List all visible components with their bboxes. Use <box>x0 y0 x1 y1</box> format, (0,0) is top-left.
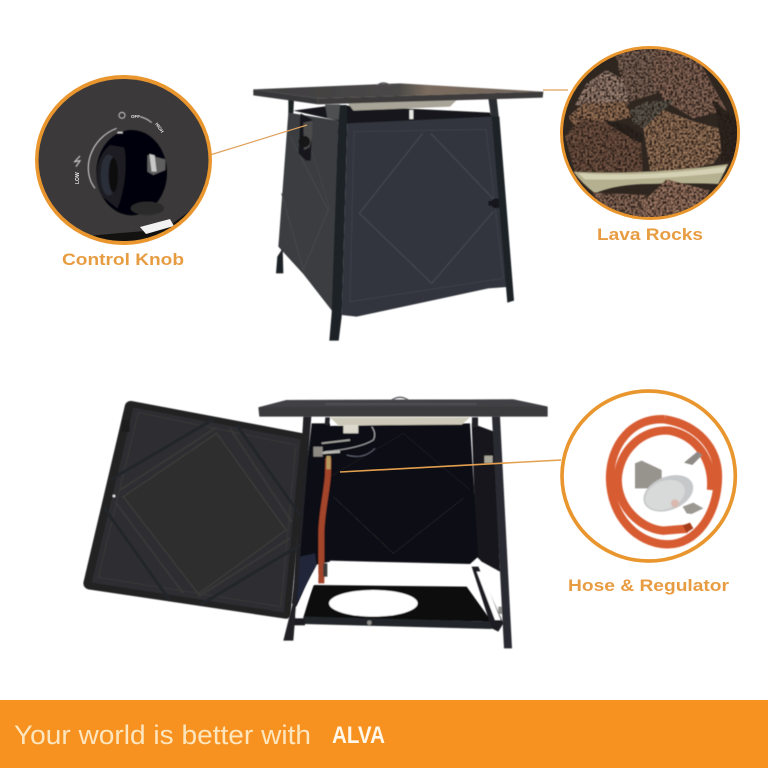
callout line: hose and regulator <box>340 460 561 472</box>
plate hole <box>329 590 418 617</box>
flame icon <box>75 156 80 167</box>
footer band <box>0 700 768 768</box>
brand name: ALVA <box>332 722 385 749</box>
left side panel <box>278 113 338 312</box>
callout line: lava rocks <box>543 89 568 91</box>
control knob circle <box>35 75 212 245</box>
front bar <box>303 617 492 629</box>
callout line: control knob <box>210 125 307 155</box>
right post and legs <box>492 117 514 303</box>
dial label high: HIGH <box>154 122 165 134</box>
open door panel <box>83 401 307 619</box>
scale arc <box>88 128 117 188</box>
gas hose <box>321 458 328 583</box>
side handle and cut-out <box>298 113 313 161</box>
hose and regulator circle <box>562 391 735 561</box>
table top <box>253 83 543 98</box>
gas valve and wires <box>317 427 375 456</box>
lower rocks <box>593 179 710 220</box>
burner tray <box>347 98 458 111</box>
right side strut <box>472 567 503 632</box>
door <box>342 117 512 317</box>
legs <box>283 417 311 641</box>
hose coils <box>610 419 718 544</box>
front corner post <box>325 105 347 341</box>
table top <box>258 399 548 417</box>
control knob label: Control Knob <box>62 250 184 269</box>
dial label off: OFF <box>131 114 140 119</box>
lava rocks label: Lava Rocks <box>597 225 703 244</box>
upper fire pit, closed door <box>253 83 543 341</box>
tray rim <box>573 164 728 193</box>
right interior panel <box>472 423 500 572</box>
door diamond <box>123 433 286 594</box>
hinge <box>122 420 130 432</box>
knob dome <box>96 130 167 215</box>
door diamond <box>359 133 493 283</box>
knob grip <box>97 145 126 208</box>
left interior panel <box>292 423 330 607</box>
burner tray underside <box>330 417 470 425</box>
hose end <box>683 523 693 533</box>
tagline: Your world is better with <box>14 720 311 750</box>
door ribs <box>103 419 300 605</box>
dial label low: LOW <box>75 172 81 184</box>
knob highlight <box>147 155 165 175</box>
small bracket <box>484 456 493 463</box>
back panel <box>324 423 478 564</box>
hose clamps <box>684 452 702 465</box>
left strut <box>293 573 318 617</box>
door handle <box>488 198 501 208</box>
hose and regulator label: Hose & Regulator <box>568 576 729 595</box>
regulator <box>635 461 699 519</box>
lava rocks circle <box>560 46 740 220</box>
lower fire pit, open door <box>258 397 548 648</box>
bottom plate <box>303 585 492 622</box>
